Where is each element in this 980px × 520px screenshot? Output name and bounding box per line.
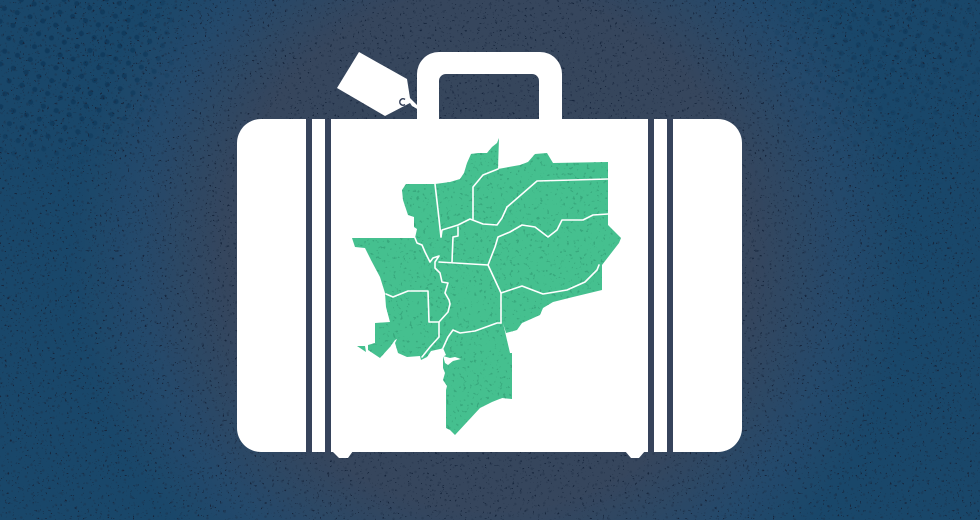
map landmass bbox=[352, 138, 621, 435]
foot right bbox=[625, 451, 645, 458]
foot left bbox=[332, 451, 353, 458]
tag eyelet bbox=[400, 99, 405, 105]
background halftone dots bbox=[0, 0, 936, 146]
county borders bbox=[386, 169, 608, 357]
bay inlet bbox=[443, 356, 461, 365]
map texture bbox=[358, 150, 620, 430]
strap stripes bbox=[306, 119, 673, 452]
luggage tag bbox=[337, 52, 419, 116]
map of counties bbox=[352, 138, 621, 435]
small island bbox=[357, 346, 366, 352]
suitcase handle bbox=[417, 52, 562, 120]
suitcase body bbox=[237, 119, 742, 458]
